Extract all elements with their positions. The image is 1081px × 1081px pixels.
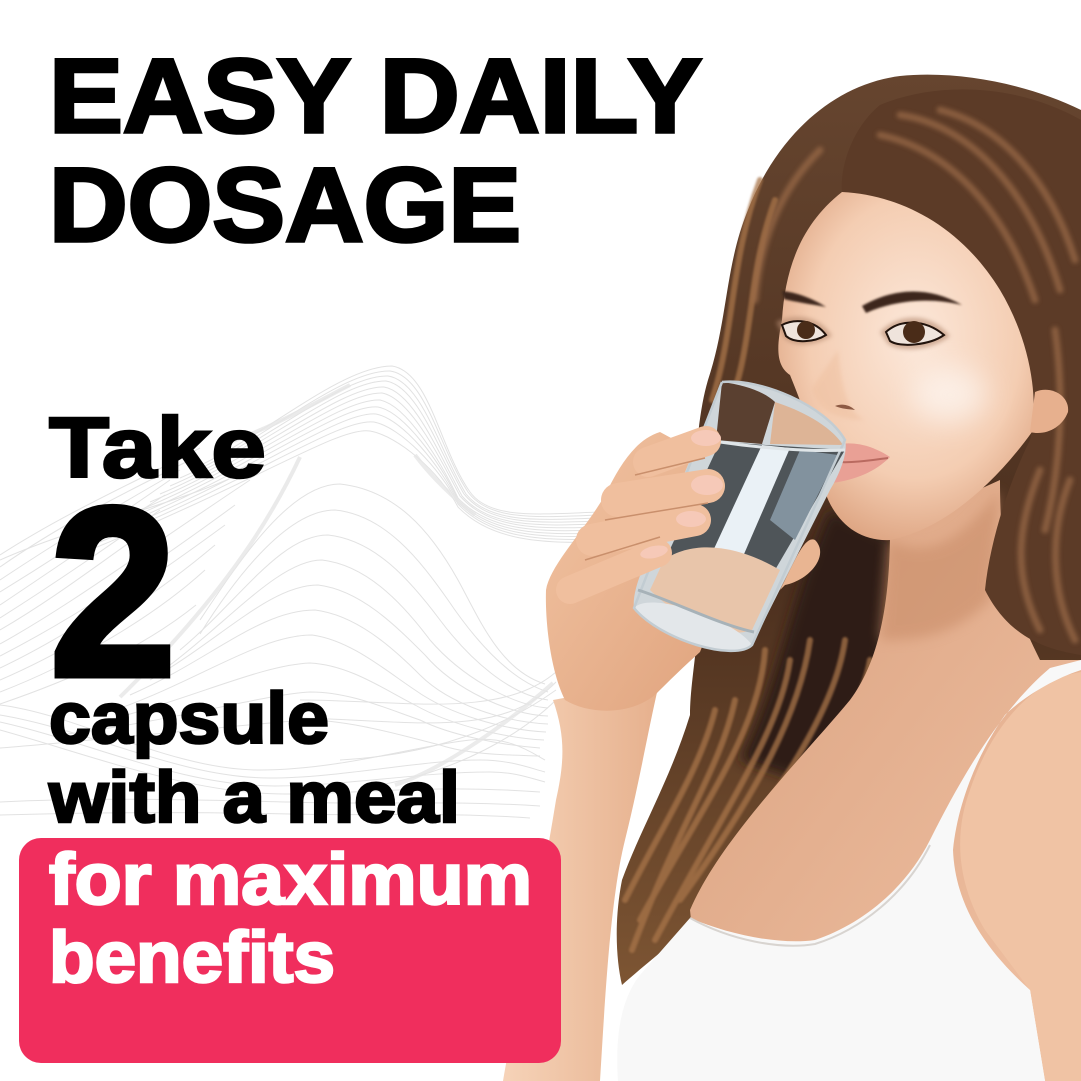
face: [778, 191, 1042, 540]
title: EASY DAILY: [49, 38, 702, 155]
right hair highlights: [755, 110, 1075, 640]
shoulder and arm: [960, 672, 1081, 1081]
decorative wave line pattern: [0, 366, 600, 818]
finger creases: [585, 458, 708, 560]
hair: [617, 75, 1081, 985]
fingers: [570, 441, 708, 590]
dosage text: Take: [49, 401, 266, 496]
cheek highlight: [912, 367, 988, 423]
neck shadow: [880, 490, 1000, 640]
hair over right of face: [842, 89, 1081, 655]
thumb behind glass: [780, 539, 820, 590]
dosage text: [48, 401, 460, 838]
tank top: [617, 660, 1081, 1081]
dosage text: 2: [50, 458, 176, 726]
woman drinking water illustration: [503, 75, 1081, 1081]
forearm and wrist: [503, 680, 660, 1081]
title: [49, 38, 702, 264]
glass: [634, 382, 846, 651]
wave crease shading: [120, 385, 553, 785]
dark hair under chin: [740, 510, 892, 780]
callout: for maximum benefits: benefits: [49, 918, 335, 998]
eyes: [776, 317, 832, 345]
dosage text: with a meal: [48, 758, 460, 838]
dosage text: capsule: [49, 679, 329, 759]
ear: [1030, 390, 1068, 433]
title: DOSAGE: [49, 147, 521, 264]
hand: [546, 432, 730, 711]
neck and chest: [690, 480, 1081, 1010]
callout: for maximum benefits: [19, 838, 561, 1063]
fingernails: [639, 430, 723, 561]
lips: [832, 443, 890, 483]
eyebrows: [782, 291, 826, 307]
nose: [812, 350, 865, 420]
callout: for maximum benefits: for maximum: [49, 840, 532, 920]
hair highlights: [625, 180, 870, 950]
